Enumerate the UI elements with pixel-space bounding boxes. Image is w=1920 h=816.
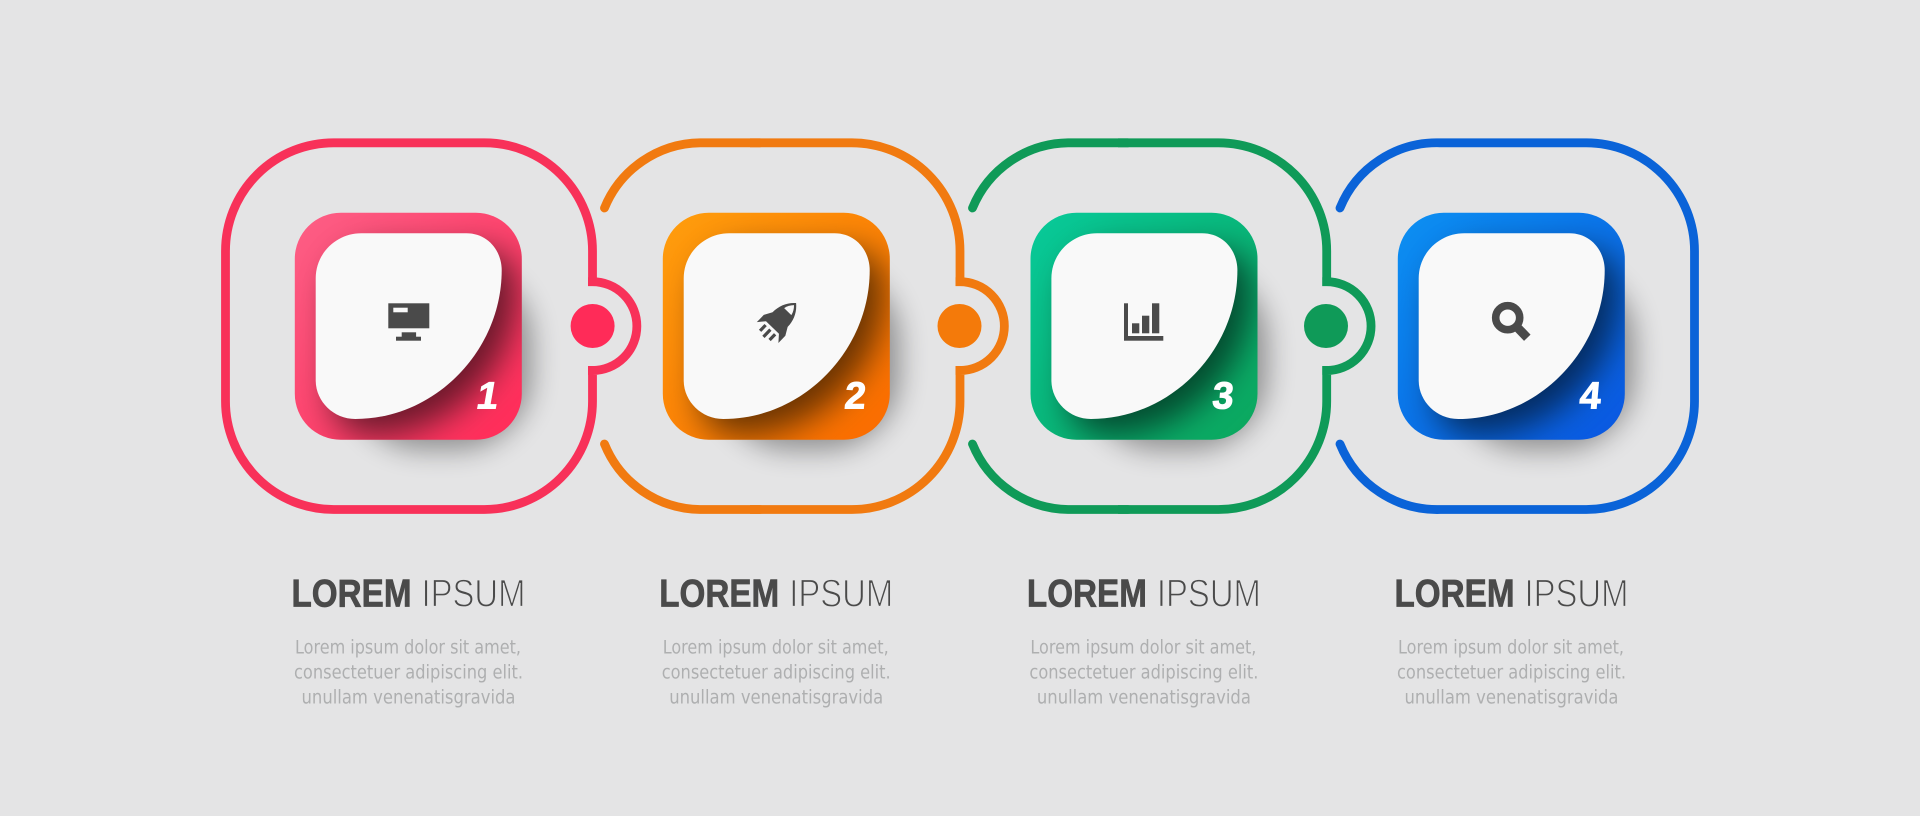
description 4: consectetuer adipiscing elit. xyxy=(1397,662,1626,684)
heading 2 xyxy=(659,573,893,616)
icon tile 4 xyxy=(1398,213,1634,449)
description 2: Lorem ipsum dolor sit amet, xyxy=(663,638,889,658)
connector dot 2 xyxy=(938,304,982,348)
description 4 xyxy=(1397,638,1626,708)
number 4: 4 xyxy=(1578,375,1603,417)
description 3: unullam venenatisgravida xyxy=(1037,688,1251,708)
description 1: Lorem ipsum dolor sit amet, xyxy=(295,638,521,658)
heading 2: IPSUM xyxy=(789,573,893,616)
connector dot 3 xyxy=(1304,304,1348,348)
number 3: 3 xyxy=(1211,375,1235,417)
outline ring 2 xyxy=(604,143,1004,510)
outline ring 4 xyxy=(1340,143,1694,510)
number 1: 1 xyxy=(474,375,502,417)
heading 1: IPSUM xyxy=(422,573,526,616)
icon: monitor xyxy=(388,303,429,341)
description 1: unullam venenatisgravida xyxy=(302,688,516,708)
icon tile 1 xyxy=(295,213,531,449)
icon tile 3 xyxy=(1030,213,1267,449)
heading 4 xyxy=(1394,573,1628,616)
heading 4: LOREM xyxy=(1394,573,1514,616)
panel: step 3 xyxy=(972,143,1371,709)
heading 1 xyxy=(292,573,526,616)
description 2 xyxy=(662,638,891,708)
icon: magnifier xyxy=(1496,306,1527,338)
description 1 xyxy=(294,638,523,708)
heading 2: LOREM xyxy=(659,573,779,616)
icon: rocket xyxy=(753,293,807,347)
description 4: Lorem ipsum dolor sit amet, xyxy=(1398,638,1624,658)
icon: bar chart xyxy=(1124,303,1163,341)
outline ring 3 xyxy=(972,143,1371,510)
panel: step 1 xyxy=(226,143,637,709)
panel: step 4 xyxy=(1340,143,1694,708)
description 4: unullam venenatisgravida xyxy=(1404,688,1618,708)
panel: step 2 xyxy=(604,143,1004,709)
icon tile 2 xyxy=(663,213,899,449)
description 1: consectetuer adipiscing elit. xyxy=(294,662,523,684)
number 2: 2 xyxy=(843,375,868,417)
outline ring 1 xyxy=(226,143,637,510)
heading 3 xyxy=(1027,573,1261,616)
heading 4: IPSUM xyxy=(1524,573,1628,616)
description 3: consectetuer adipiscing elit. xyxy=(1029,662,1258,684)
description 2: consectetuer adipiscing elit. xyxy=(662,662,891,684)
heading 3: IPSUM xyxy=(1157,573,1261,616)
description 3: Lorem ipsum dolor sit amet, xyxy=(1030,638,1256,658)
description 2: unullam venenatisgravida xyxy=(669,688,883,708)
connector dot 1 xyxy=(571,304,615,348)
heading 1: LOREM xyxy=(292,573,412,616)
description 3 xyxy=(1029,638,1258,708)
heading 3: LOREM xyxy=(1027,573,1147,616)
